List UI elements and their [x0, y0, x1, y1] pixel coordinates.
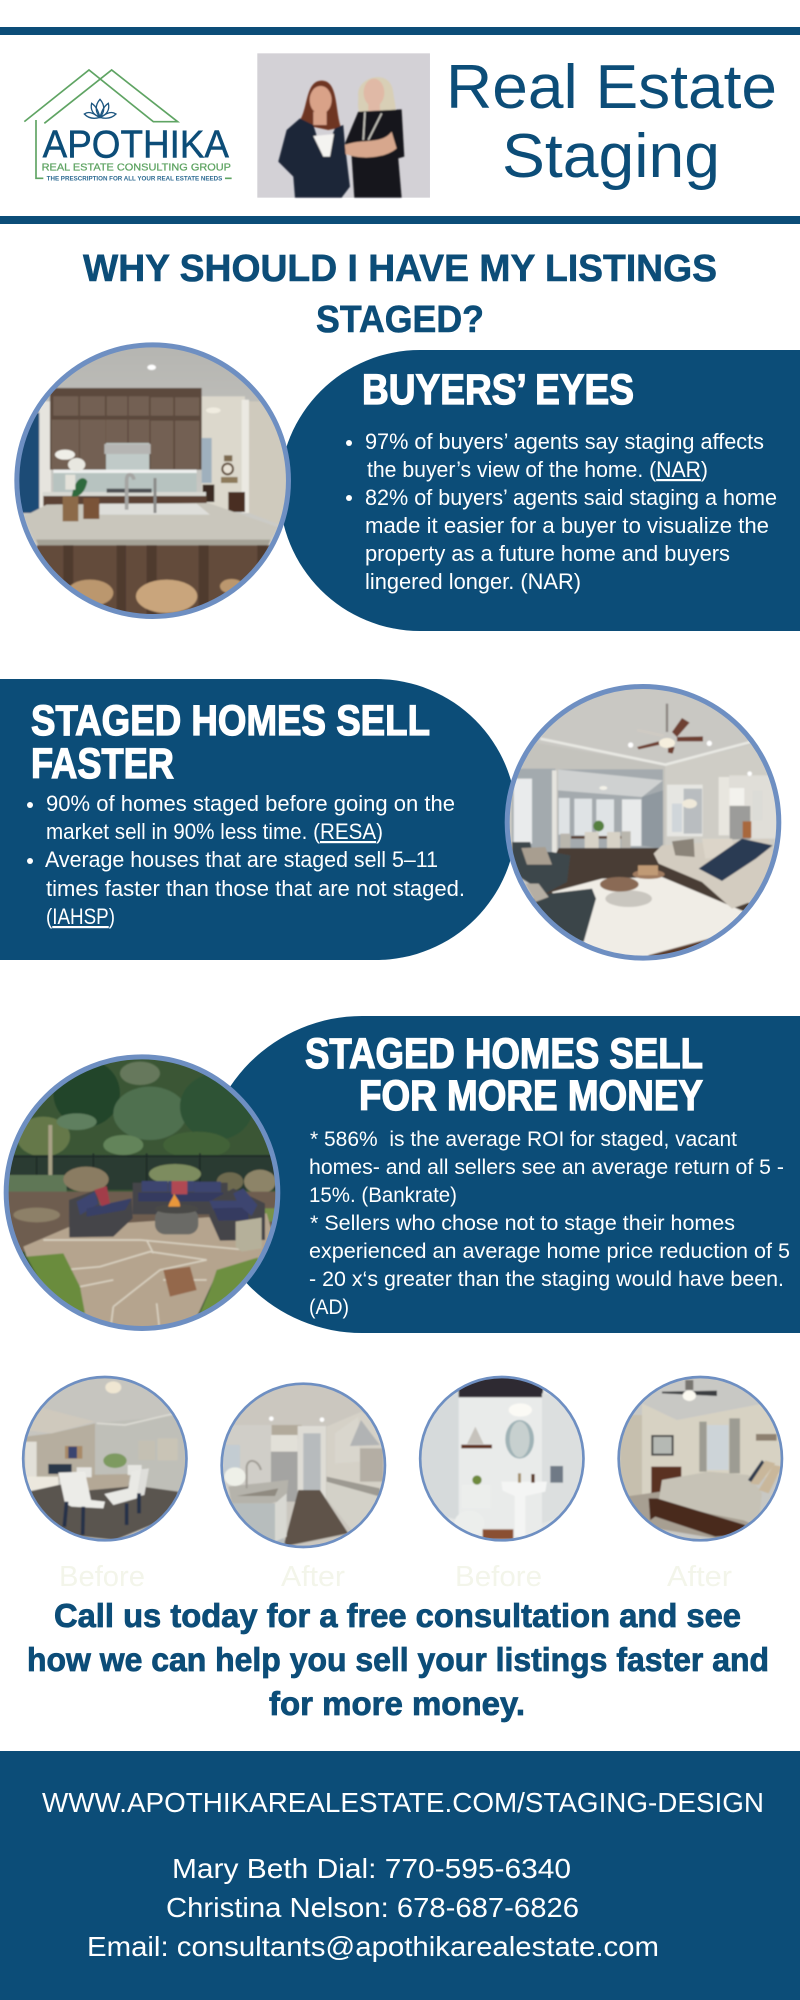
text block: more money: experienced an average home price reduction of 5 [309, 1239, 790, 1263]
contact details [87, 1853, 659, 1962]
title [446, 53, 777, 191]
header band [0, 27, 800, 224]
text block: more money: 15%. (Bankrate) [309, 1183, 457, 1207]
bullet list: buyers' eyes: the buyer’s view of the home. (NAR) [367, 457, 708, 482]
bullet list: buyers' eyes: lingered longer. (NAR) [365, 569, 581, 594]
bullet list: buyers' eyes: made it easier for a buyer to visualize the [365, 513, 769, 538]
title: Staging [502, 122, 720, 191]
photo: kitchen [10, 338, 295, 624]
website url: WWW.APOTHIKAREALESTATE.COM/STAGING-DESIGN [42, 1787, 764, 1818]
heading: why staged: WHY SHOULD I HAVE MY LISTINGS [83, 248, 717, 290]
bullet list: sell faster: Average houses that are staged sell 5–11 [45, 847, 438, 872]
bullet list: sell faster [27, 791, 465, 929]
heading: more money [305, 1030, 703, 1120]
footer panel [0, 1751, 800, 2000]
panel: more money [204, 1016, 800, 1333]
text block: more money: homes- and all sellers see an average return of 5 - [309, 1155, 784, 1179]
heading: sell faster [31, 697, 430, 788]
bullet list: buyers' eyes: 97% of buyers’ agents say staging affects [365, 429, 764, 454]
text block: more money: (AD) [309, 1295, 349, 1319]
photo: before bathroom [418, 1376, 585, 1542]
logo: Apothika: REAL ESTATE CONSULTING GROUP [42, 163, 231, 174]
captions: before and after: Before [455, 1561, 542, 1593]
heading: why staged: STAGED? [316, 299, 484, 341]
photo: living room [502, 682, 787, 969]
heading: more money: FOR MORE MONEY [359, 1072, 703, 1120]
contact details: Christina Nelson: 678-687-6826 [166, 1892, 579, 1923]
captions: before and after [59, 1561, 732, 1593]
call to action: Call us today for a free consultation and see [54, 1597, 741, 1634]
photo: patio [0, 1050, 285, 1337]
bullet list: sell faster: times faster than those that are not staged. [46, 876, 465, 901]
bullet list: buyers' eyes: 82% of buyers’ agents said staging a home [365, 485, 777, 510]
bullet list: buyers' eyes: property as a future home and buyers [365, 541, 730, 566]
contact details: Mary Beth Dial: 770-595-6340 [172, 1853, 571, 1884]
captions: before and after: Before [59, 1561, 145, 1593]
call to action: for more money. [269, 1685, 525, 1722]
call to action [27, 1597, 769, 1722]
captions: before and after: After [667, 1561, 732, 1593]
bullet list: sell faster: (IAHSP) [46, 904, 115, 929]
heading: why staged [83, 248, 717, 341]
photo: before dining room [22, 1376, 188, 1542]
bullet list: buyers' eyes [346, 429, 777, 594]
heading: more money: STAGED HOMES SELL [305, 1030, 703, 1078]
photo: after kitchen [220, 1382, 386, 1548]
title: Real Estate [446, 53, 777, 122]
text block: more money: * Sellers who chose not to stage their homes [310, 1211, 735, 1235]
contact details: Email: consultants@apothikarealestate.com [87, 1931, 659, 1962]
captions: before and after: After [281, 1561, 345, 1593]
logo: Apothika [24, 70, 232, 183]
text block: more money [309, 1127, 790, 1319]
panel: buyers' eyes [280, 350, 800, 631]
text block: more money: * 586% is the average ROI for staged, vacant [310, 1127, 737, 1151]
logo: Apothika: APOTHIKA [43, 122, 230, 166]
text block: more money: - 20 x‘s greater than the staging would have been. [309, 1267, 784, 1291]
photo: after bedroom [617, 1376, 784, 1542]
logo: Apothika: THE PRESCRIPTION FOR ALL YOUR REAL ESTATE NEEDS [47, 177, 222, 183]
heading: sell faster: FASTER [31, 740, 174, 788]
panel: sell faster [0, 679, 516, 960]
call to action: how we can help you sell your listings faster and [27, 1641, 769, 1678]
bullet list: sell faster: 90% of homes staged before going on the [46, 791, 455, 816]
heading: buyers' eyes: BUYERS’ EYES [362, 366, 634, 414]
heading: sell faster: STAGED HOMES SELL [31, 697, 430, 745]
bullet list: sell faster: market sell in 90% less time. (RESA) [46, 819, 383, 844]
photo: two consultants [257, 53, 430, 198]
